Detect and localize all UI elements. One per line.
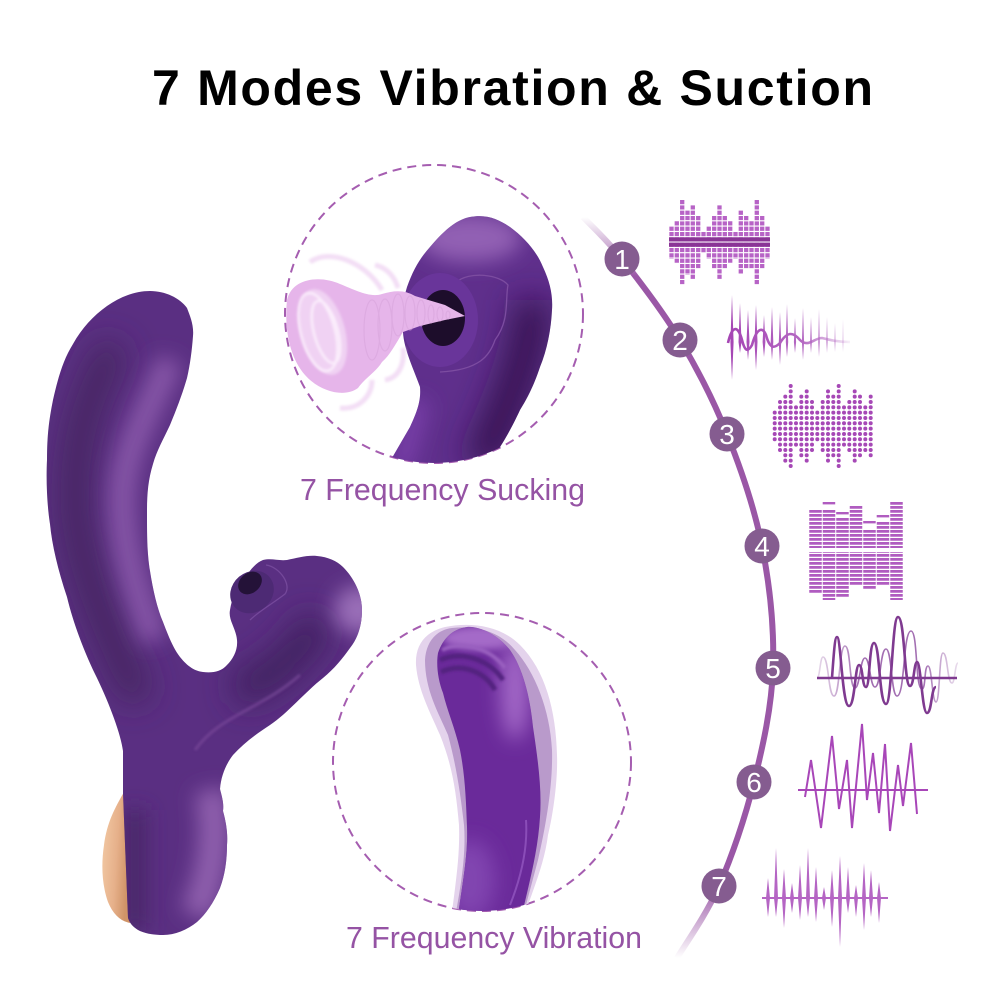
suction air swirl [286,257,465,408]
ghost layer inner [425,627,552,912]
title: 7 Modes Vibration & Suction [152,60,873,116]
mode 7 marker [702,868,736,904]
waveform 2: decaying spikes [728,295,850,380]
body shading [75,345,382,930]
mode 7 marker: 7 [711,871,727,902]
gold base trim [102,792,130,923]
device head close-up [385,214,552,475]
mode 5 marker: 5 [765,653,781,684]
dashed circle [333,613,631,911]
mode 6 marker [736,764,772,800]
ghost layer outer [416,625,557,912]
waveform 6: zigzag line [798,724,928,831]
dashed circle [285,165,583,463]
caption: 7 Frequency Sucking: 7 Frequency Sucking [300,472,585,507]
mode 2 marker: 2 [672,325,688,356]
mode 4 marker: 4 [754,531,770,562]
mode 1 marker: 1 [614,244,630,275]
product: full device [47,291,382,935]
panel: vibration detail circle [333,613,631,920]
suction mouth on device [222,562,287,622]
vibrating arm close-up [416,625,557,920]
mouth lip [402,273,478,367]
mouth opening [421,290,465,346]
waveform 3: dot matrix [775,386,871,467]
purple silicone body [47,291,362,935]
mode 3 marker: 3 [719,419,735,450]
mode 5 marker [756,650,790,686]
waveform 1: pixel grid [669,200,770,285]
main arm [437,627,541,915]
mode 6 marker: 6 [746,767,762,798]
mode 4 marker [744,528,780,564]
mode 3 marker [710,416,744,452]
panel: sucking detail circle [285,165,583,475]
mode 1 marker [604,242,640,276]
waveform 7: spindle bursts [762,848,888,947]
caption: 7 Frequency Vibration: 7 Frequency Vibration [346,920,642,955]
arc timeline [583,217,773,958]
mode 2 marker [662,322,698,358]
waveform 4: stacked equalizer bars [809,502,903,600]
waveform 5: overlapping sine curves [817,617,958,713]
